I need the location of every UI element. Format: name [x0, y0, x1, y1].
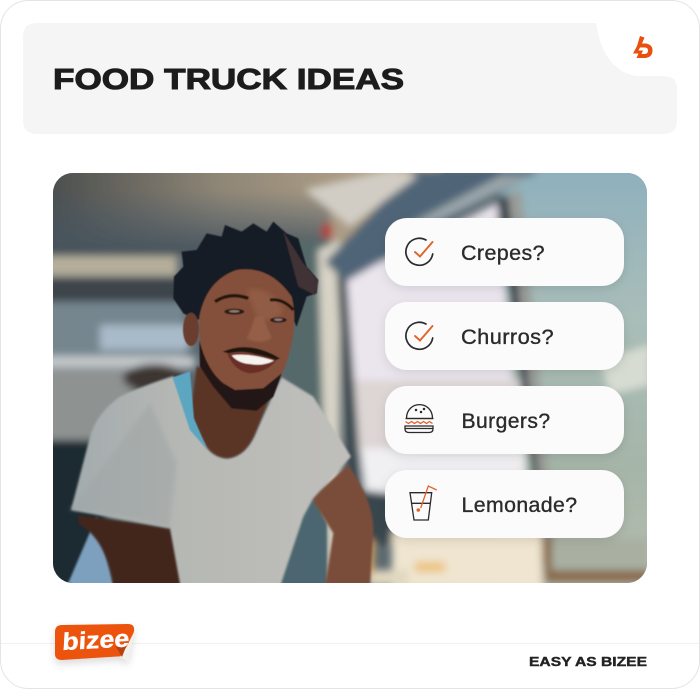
label: Crepes? — [461, 242, 545, 265]
icon: lemonade glass — [410, 486, 437, 520]
icon: burger — [405, 405, 434, 432]
option: Churros — [385, 302, 624, 370]
logo: bizee sticker — [55, 624, 134, 661]
icon: brand mark — [633, 36, 652, 58]
label: Churros? — [461, 326, 554, 349]
icon: orange check — [406, 238, 433, 265]
t-shirt — [71, 376, 351, 587]
header panel — [23, 23, 677, 134]
collar — [173, 371, 207, 450]
beard — [199, 340, 282, 411]
tagline: EASY AS BIZEE — [529, 654, 647, 669]
hair and face — [173, 222, 318, 411]
option: Lemonade — [385, 470, 624, 538]
option: Burgers — [385, 386, 624, 454]
arms — [78, 465, 373, 587]
ear — [183, 313, 199, 346]
photo: smiling food truck worker — [40, 160, 660, 595]
label: Lemonade? — [462, 494, 578, 517]
hair — [173, 222, 318, 327]
photo background — [40, 160, 660, 595]
footer divider — [1, 643, 699, 644]
neck — [190, 367, 277, 458]
nose — [247, 317, 272, 342]
logo wordmark: bizee — [62, 625, 130, 656]
icon: orange check — [406, 322, 433, 349]
moustache and smile — [223, 347, 280, 362]
brows — [215, 296, 248, 302]
title: FOOD TRUCK IDEAS — [53, 64, 404, 96]
label: Burgers? — [462, 410, 550, 433]
eyes — [224, 309, 244, 315]
face skin — [199, 269, 294, 400]
photo subject — [67, 222, 373, 587]
option: Crepes — [385, 218, 624, 286]
